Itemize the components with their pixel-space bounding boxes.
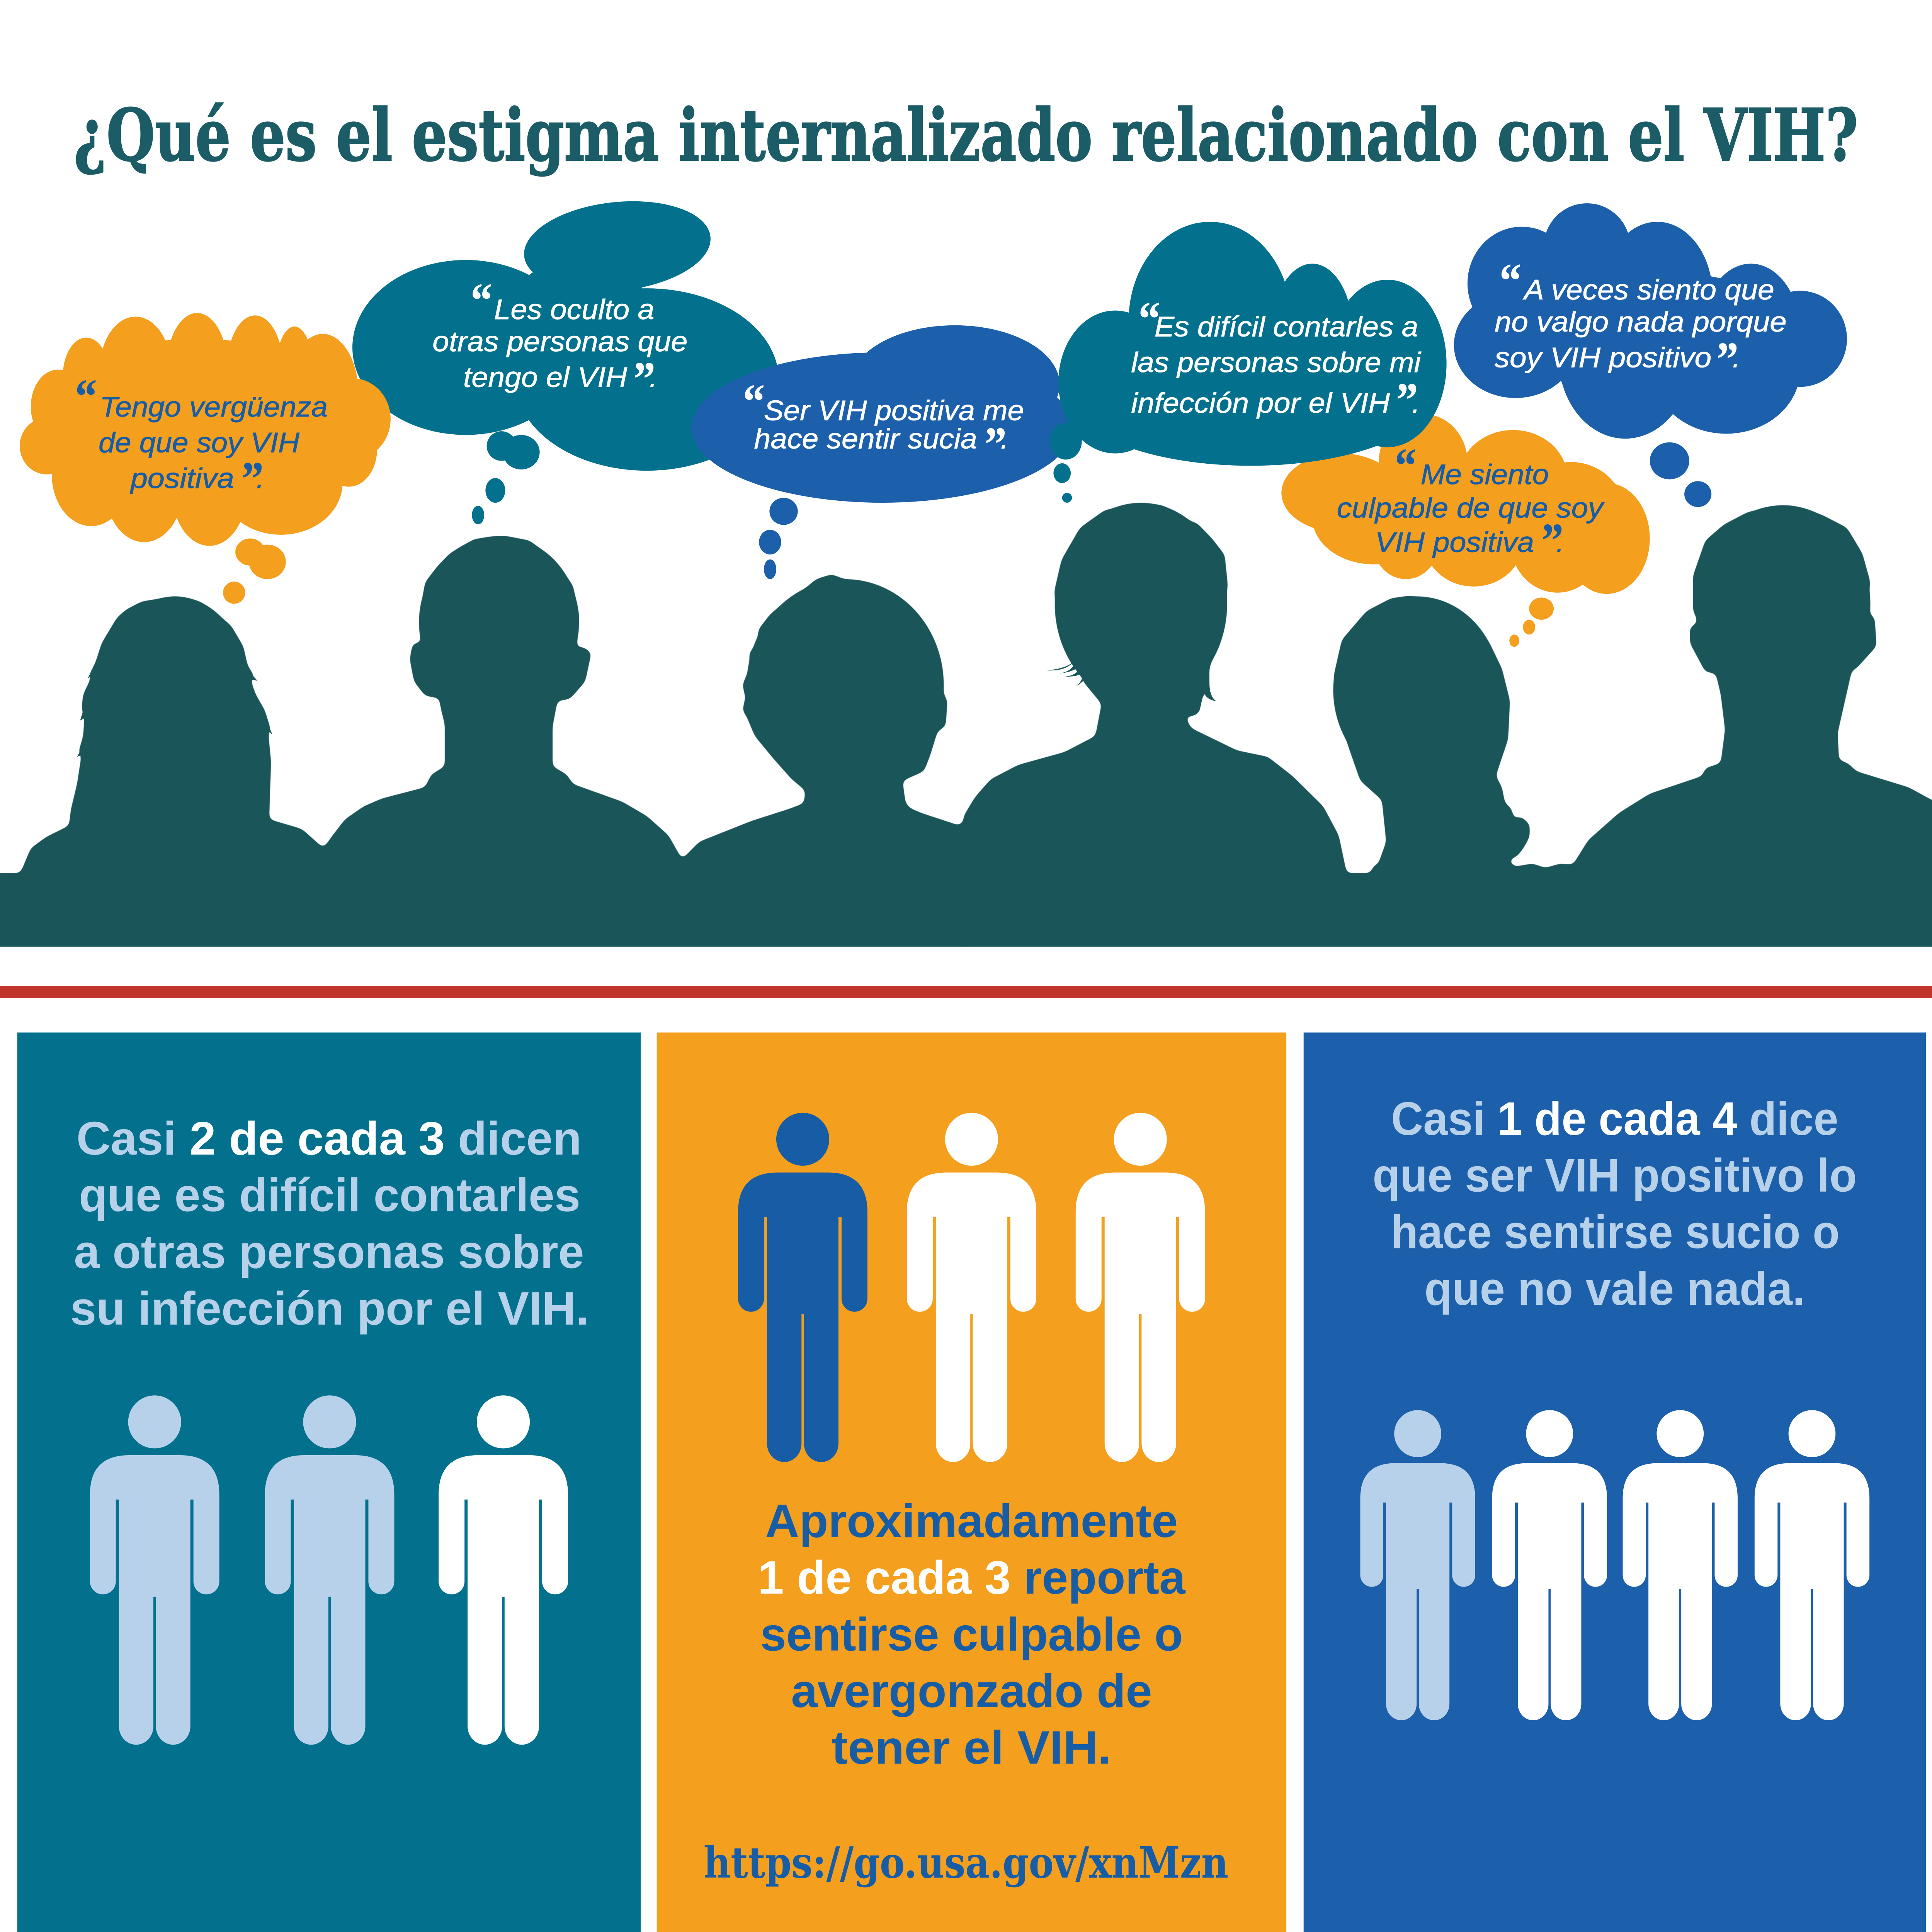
people icons: 1 of 3 <box>738 1113 1205 1462</box>
panel text: 1 of 3: avergonzado de <box>791 1665 1152 1717</box>
panel: 1 of 3 <box>657 1032 1286 1932</box>
thought bubble: blue, dirty: hace sentir sucia <box>754 423 977 455</box>
thought bubble: orange, shame: . <box>256 463 264 494</box>
thought bubble: orange, guilt: culpable de que soy <box>1337 492 1605 524</box>
thought bubble: teal, hard to tell: Es difícil contarles a <box>1155 311 1418 343</box>
panel heading: 2 of 3: a otras personas sobre <box>74 1225 584 1278</box>
thought bubble: blue, worthless: no valgo nada porque <box>1495 306 1787 338</box>
thought bubble: teal, hard to tell: infección por el VIH <box>1131 387 1390 419</box>
panel heading: 1 of 4: que no vale nada. <box>1424 1262 1805 1315</box>
panel heading: 1 of 4: hace sentirse sucio o <box>1391 1206 1840 1258</box>
thought bubble: orange, guilt: “ <box>1392 438 1416 493</box>
silhouettes of six people <box>0 503 1932 947</box>
thought bubble: blue, worthless: “ <box>1497 253 1520 308</box>
panel heading: 2 of 3: Casi 2 de cada 3 dicen <box>77 1112 582 1165</box>
thought bubble: orange, shame <box>20 313 391 604</box>
thought bubble: teal, hiding: otras personas que <box>432 326 687 357</box>
panel heading: 2 of 3: que es difícil contarles <box>79 1169 580 1221</box>
thought bubble: blue, worthless: . <box>1732 342 1740 373</box>
thought bubble: teal, hard to tell: “ <box>1136 291 1160 346</box>
panel text: 1 of 3: sentirse culpable o <box>760 1608 1183 1660</box>
panel text: 1 of 3 <box>758 1495 1186 1774</box>
thought bubble: orange, shame: Tengo vergüenza <box>100 391 328 423</box>
thought bubble: orange, guilt: VIH positiva <box>1375 527 1534 558</box>
thought bubble: blue, worthless: ” <box>1714 332 1737 387</box>
thought bubble: blue, dirty: “ <box>740 374 764 429</box>
thought bubble: teal, hiding: “ <box>468 273 492 328</box>
panel heading: 1 of 4: que ser VIH positivo lo <box>1372 1149 1857 1202</box>
thought bubble: blue, dirty: ” <box>982 417 1005 472</box>
thought bubble: teal, hiding: Les oculto a <box>494 294 654 325</box>
thought bubble: orange, shame: “ <box>73 369 96 423</box>
thought bubble: blue, dirty: Ser VIH positiva me <box>764 395 1024 426</box>
panel: 1 of 4 <box>1304 1032 1926 1932</box>
thought bubble: orange, guilt: Me siento <box>1421 459 1549 490</box>
thought bubble: orange, shame: positiva <box>130 463 234 494</box>
thought bubble: teal, hiding: tengo el VIH <box>463 361 628 393</box>
people icons: 1 of 4 <box>1360 1410 1869 1720</box>
thought bubble: blue, worthless: soy VIH positivo <box>1495 342 1711 373</box>
thought bubble: teal, hard to tell: las personas sobre mi <box>1131 347 1421 378</box>
thought bubble: blue, dirty: . <box>1000 423 1009 455</box>
people icons: 2 of 3 <box>90 1395 568 1745</box>
thought bubble: orange, guilt <box>1281 414 1650 647</box>
thought bubble: blue, dirty <box>691 325 1073 579</box>
thought bubble: teal, hiding: ” <box>631 352 654 406</box>
panel heading: 2 of 3 <box>70 1112 589 1335</box>
panel text: 1 of 3: 1 de cada 3 reporta <box>758 1551 1186 1604</box>
thought bubble: teal, hiding <box>352 192 779 524</box>
panel heading: 1 of 4 <box>1372 1092 1857 1315</box>
panel text: 1 of 3: tener el VIH. <box>832 1721 1111 1774</box>
thought bubble: teal, hard to tell <box>1050 222 1447 503</box>
thought bubble: orange, shame: de que soy VIH <box>99 427 300 458</box>
thought bubble: teal, hard to tell: ” <box>1394 372 1417 427</box>
thought bubble: orange, guilt: ” <box>1539 513 1562 568</box>
panel heading: 1 of 4: Casi 1 de cada 4 dice <box>1391 1092 1838 1145</box>
url: https://go.usa.gov/xnMzn <box>704 1838 1228 1888</box>
thought bubble: blue, worthless <box>1454 203 1847 507</box>
thought bubble: teal, hiding: . <box>649 361 657 393</box>
thought bubble: teal, hard to tell: . <box>1412 387 1420 419</box>
panel: 2 of 3 <box>17 1032 641 1932</box>
panel text: 1 of 3: Aproximadamente <box>765 1495 1178 1547</box>
thought bubble: orange, shame: ” <box>239 451 262 506</box>
thought bubble: blue, worthless: A veces siento que <box>1522 274 1774 306</box>
panel heading: 2 of 3: su infección por el VIH. <box>70 1282 589 1335</box>
thought bubble: orange, guilt: . <box>1556 527 1564 558</box>
